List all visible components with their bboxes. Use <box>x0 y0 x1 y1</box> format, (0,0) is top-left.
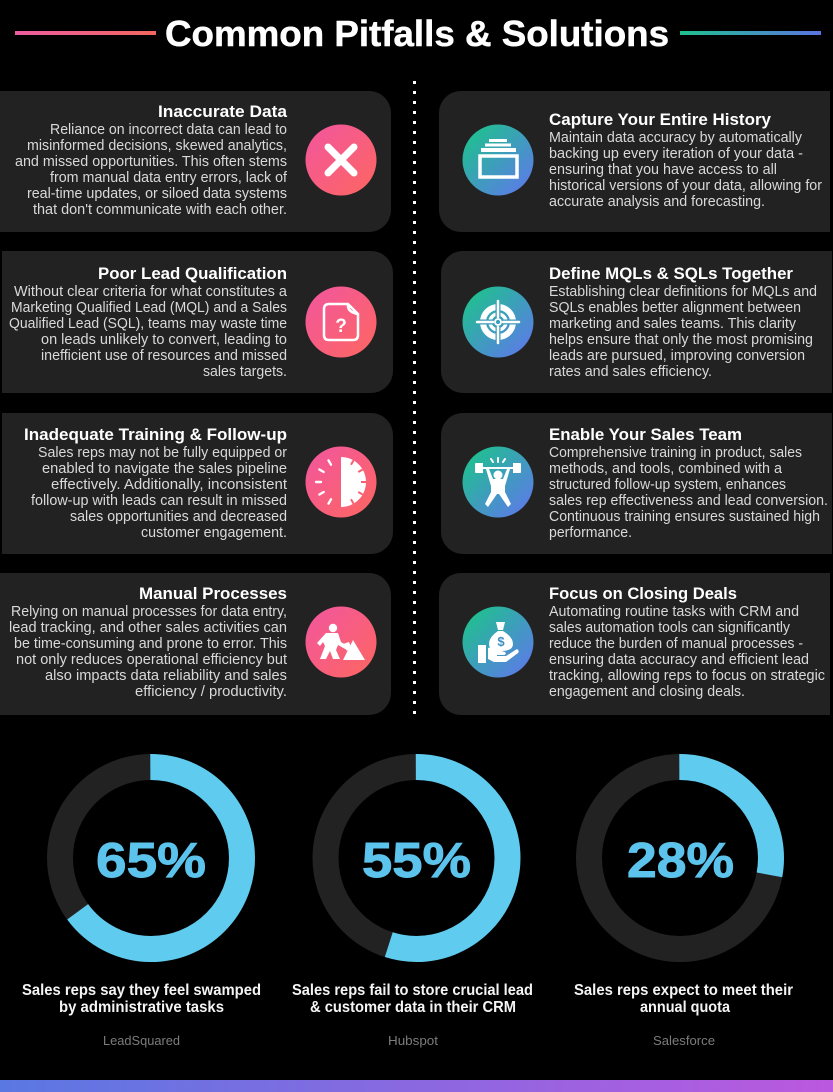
body text: lead tracking, and other sales activities can <box>9 620 287 636</box>
body text: from manual data entry errors, lack of <box>50 170 288 186</box>
caption <box>574 982 793 1016</box>
heading: Inadequate Training & Follow-up <box>24 425 287 444</box>
heading: Enable Your Sales Team <box>549 425 742 444</box>
icon: money bag in hand: $ <box>497 634 505 649</box>
donut chart <box>589 767 771 949</box>
icon: target <box>462 286 534 358</box>
body text: Relying on manual processes for data entry, <box>11 604 287 620</box>
body text: Comprehensive training in product, sales <box>549 445 802 461</box>
body text: and missed opportunities. This often stems <box>15 154 287 170</box>
body text: also impacts data reliability and sales <box>45 668 287 684</box>
panel: solution define MQLs and SQLs <box>441 251 832 393</box>
header line left <box>15 31 156 35</box>
panel: pitfall poor lead qualification <box>2 251 393 393</box>
body text: be time-consuming and prone to error. This <box>14 636 287 652</box>
panel: solution capture history <box>439 91 830 232</box>
heading: Capture Your Entire History <box>549 110 772 129</box>
panel: pitfall inaccurate data <box>0 91 391 232</box>
donut chart <box>60 767 242 949</box>
icon: weightlifter <box>462 446 534 518</box>
body text: not only reduces operational efficiency but <box>16 652 287 668</box>
icon: stacked archive <box>462 124 534 196</box>
body text <box>549 284 817 380</box>
stat: 55 percent <box>292 767 533 1048</box>
body text: inefficient use of resources and missed <box>41 348 287 364</box>
body text: engagement and closing deals. <box>549 684 745 700</box>
heading: Define MQLs & SQLs Together <box>549 264 793 283</box>
value: 55% <box>362 834 471 888</box>
caption: Sales reps expect to meet their <box>574 982 793 999</box>
stat: 65 percent <box>22 767 261 1048</box>
source: Salesforce <box>653 1033 715 1048</box>
body text: ensuring that you have access to all <box>549 162 777 178</box>
source: Hubspot <box>388 1033 438 1048</box>
body text <box>9 604 287 700</box>
value: 65% <box>96 834 206 888</box>
body text: sales rep effectiveness and lead conversion. <box>549 493 828 509</box>
body text <box>31 445 287 541</box>
body text: Qualified Lead (SQL), teams may waste time <box>9 316 287 332</box>
header <box>15 13 821 54</box>
body text <box>549 604 825 700</box>
body text: Continuous training ensures sustained high <box>549 509 820 525</box>
body text: helps ensure that only the most promising <box>549 332 813 348</box>
caption: & customer data in their CRM <box>310 999 516 1016</box>
body text: on leads unlikely to convert, leading to <box>41 332 287 348</box>
body text: backing up every iteration of your data - <box>549 146 803 162</box>
panel: solution enable sales team <box>441 413 832 554</box>
body text: Marketing Qualified Lead (MQL) and a Sales <box>11 300 287 316</box>
body text: that don't communicate with each other. <box>33 202 287 218</box>
caption: Sales reps fail to store crucial lead <box>292 982 533 999</box>
body text: real-time updates, or siloed data systems <box>27 186 287 202</box>
body text: Reliance on incorrect data can lead to <box>50 122 287 138</box>
body text: ensuring data accuracy and efficient lead <box>549 652 809 668</box>
body text: methods, and tools, combined with a <box>549 461 783 477</box>
body text: Automating routine tasks with CRM and <box>549 604 799 620</box>
caption <box>22 982 261 1016</box>
body text: tracking, allowing reps to focus on strategic <box>549 668 825 684</box>
body text <box>9 284 288 380</box>
body text: misinformed decisions, skewed analytics, <box>27 138 287 154</box>
body text: marketing and sales teams. This clarity <box>549 316 797 332</box>
title: Common Pitfalls & Solutions <box>165 13 669 54</box>
caption: Sales reps say they feel swamped <box>22 982 261 999</box>
panel: solution focus on closing deals <box>439 573 830 715</box>
body text: sales targets. <box>203 364 287 380</box>
body text: effectively. Additionally, inconsistent <box>51 477 287 493</box>
body text: Maintain data accuracy by automatically <box>549 130 803 146</box>
panel: pitfall manual processes <box>0 573 391 715</box>
bottom gradient bar <box>0 1080 833 1092</box>
body text <box>15 122 288 218</box>
body text: performance. <box>549 525 632 541</box>
body text: follow-up with leads can result in missed <box>31 493 287 509</box>
icon: document question <box>306 286 376 358</box>
icon: document question: ? <box>335 316 347 337</box>
body text: leads are pursued, improving conversion <box>549 348 805 364</box>
icon: worker shoveling <box>306 606 376 678</box>
body text: SQLs enables better alignment between <box>549 300 801 316</box>
panel: pitfall inadequate training <box>2 413 393 554</box>
donut chart <box>326 767 508 949</box>
body text: Without clear criteria for what constitutes a <box>14 284 288 300</box>
caption <box>292 982 533 1016</box>
body text: reduce the burden of manual processes - <box>549 636 803 652</box>
caption: annual quota <box>640 999 730 1016</box>
value: 28% <box>627 834 734 888</box>
source: LeadSquared <box>103 1033 180 1048</box>
heading: Focus on Closing Deals <box>549 584 737 603</box>
icon: x mark <box>306 124 376 196</box>
body text: enabled to navigate the sales pipeline <box>42 461 287 477</box>
body text: structured follow-up system, enhances <box>549 477 786 493</box>
stat: 28 percent <box>574 767 793 1048</box>
heading: Manual Processes <box>139 584 287 603</box>
body text: accurate analysis and forecasting. <box>549 194 765 210</box>
body text: efficiency / productivity. <box>135 684 287 700</box>
body text: historical versions of your data, allowing for <box>549 178 822 194</box>
body text: sales automation tools can significantly <box>549 620 791 636</box>
heading: Poor Lead Qualification <box>98 264 287 283</box>
icon: half gauge <box>306 446 376 518</box>
body text <box>549 130 822 210</box>
body text: rates and sales efficiency. <box>549 364 712 380</box>
body text: customer engagement. <box>141 525 287 541</box>
body text: Sales reps may not be fully equipped or <box>38 445 287 461</box>
caption: by administrative tasks <box>59 999 224 1016</box>
heading: Inaccurate Data <box>158 102 288 121</box>
body text <box>549 445 828 541</box>
header line right <box>680 31 821 35</box>
dotted center divider <box>413 81 416 714</box>
body text: Establishing clear definitions for MQLs and <box>549 284 817 300</box>
icon: money bag in hand <box>462 606 534 678</box>
body text: sales opportunities and decreased <box>70 509 287 525</box>
